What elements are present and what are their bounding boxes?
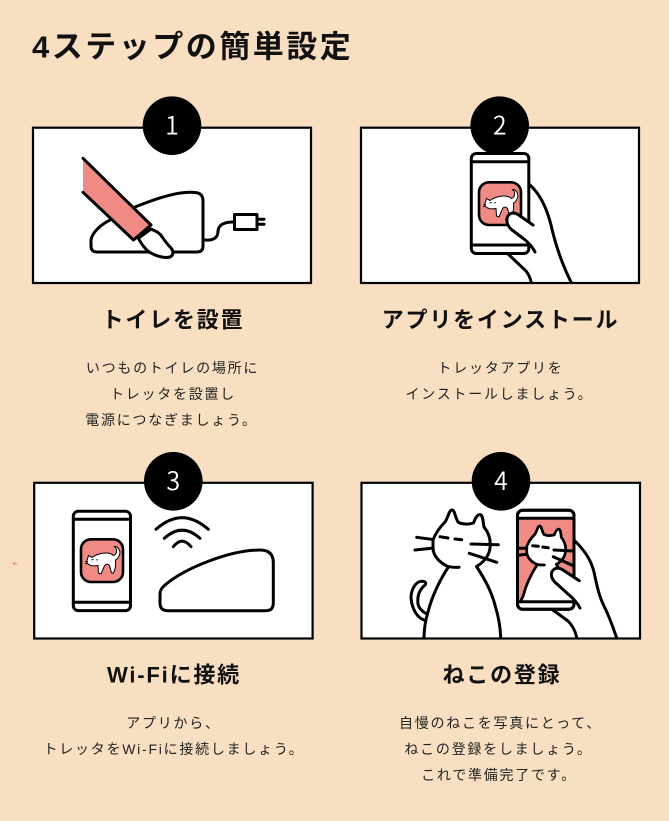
- illustration: phone: [73, 511, 130, 611]
- small pink mark: [13, 562, 18, 565]
- panel frame 4: [362, 483, 640, 638]
- description: step 1: 電源につなぎましょう。: [85, 412, 258, 428]
- illustration: phone with app and hand: [471, 154, 571, 282]
- panel frame 1: [33, 128, 311, 283]
- number badge 1: [143, 96, 201, 155]
- number badge 4: 4: [494, 462, 508, 498]
- icon: wifi: [156, 518, 208, 547]
- phone screen: [519, 520, 572, 600]
- panel: step 1: [33, 96, 311, 283]
- description: step 1: [85, 360, 259, 428]
- description: step 3: [43, 715, 305, 757]
- number badge 3: 3: [166, 462, 180, 498]
- description: step 3: アプリから、: [126, 715, 221, 731]
- title: 4ステップの簡単設定: [32, 30, 353, 64]
- description: step 4: ねこの登録をしましょう。: [404, 741, 593, 757]
- heading: step 4: ねこの登録: [442, 662, 562, 688]
- panel: step 3: [34, 452, 313, 638]
- description: step 4: 自慢のねこを写真にとって、: [399, 715, 602, 731]
- illustration: phone with cat photo and hand: [511, 510, 617, 638]
- heading: step 1: トイレを設置: [102, 308, 244, 332]
- description: step 2: トレッタアプリを: [438, 360, 564, 376]
- number badge 4: [472, 452, 530, 511]
- number badge 2: 2: [493, 106, 507, 142]
- description: step 2: インストールしましょう。: [406, 386, 593, 402]
- panel: step 4: [362, 452, 640, 638]
- panel frame 3: [34, 483, 313, 638]
- app icon: [479, 182, 521, 225]
- heading: step 3: Wi-Fiに接続: [107, 662, 241, 688]
- illustration: toilet with arm and plug: [83, 158, 264, 257]
- number badge 2: [470, 96, 529, 155]
- description: step 1: トレッタを設置し: [110, 386, 236, 402]
- panel frame 2: [361, 128, 639, 283]
- heading: step 2: アプリをインストール: [382, 308, 619, 332]
- description: step 4: [399, 715, 602, 783]
- illustration: cat: [411, 510, 501, 638]
- panel: step 2: [361, 96, 639, 283]
- description: step 1: いつものトイレの場所に: [86, 360, 259, 376]
- illustration: toilet: [160, 550, 273, 611]
- description: step 4: これで準備完了です。: [421, 767, 577, 783]
- number badge 3: [144, 452, 203, 511]
- app icon: [81, 539, 123, 582]
- number badge 1: 1: [165, 106, 179, 142]
- description: step 2: [406, 360, 593, 402]
- description: step 3: トレッタをWi-Fiに接続しましょう。: [43, 741, 305, 757]
